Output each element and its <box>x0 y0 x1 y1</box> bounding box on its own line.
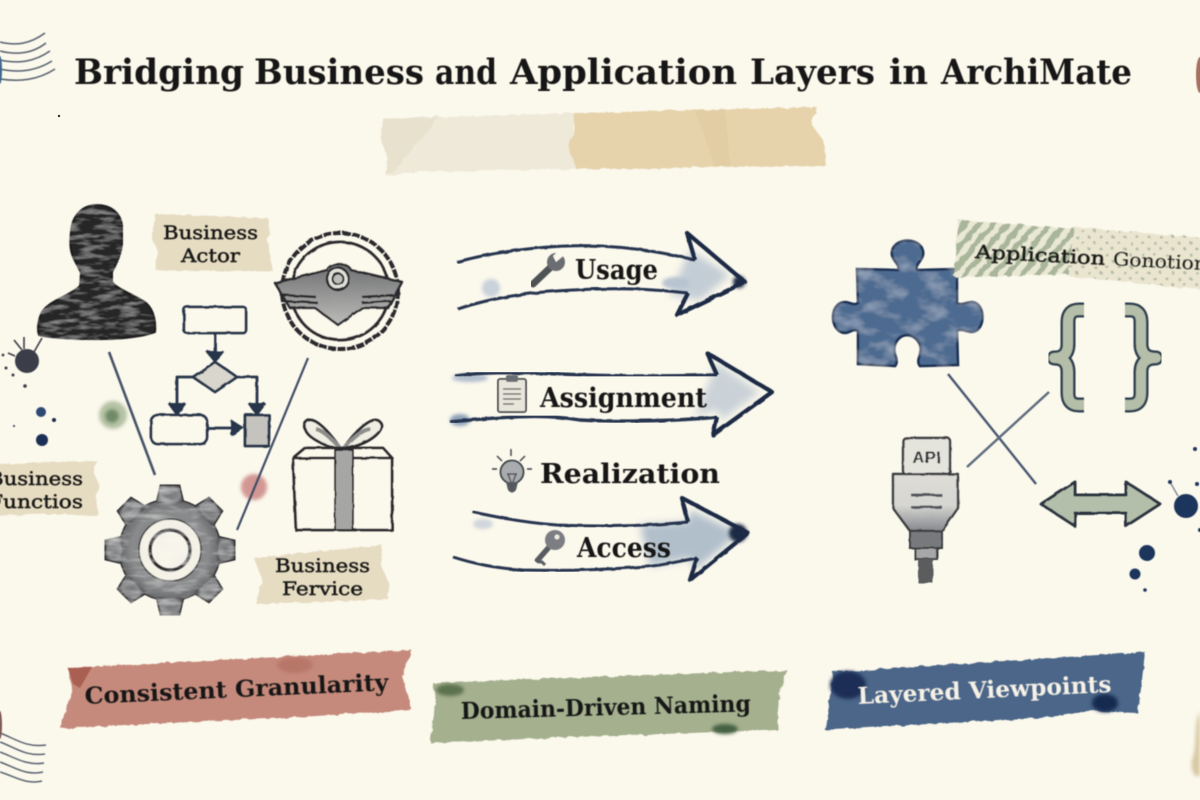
tape: consistent granularity: Consistent Granularity <box>84 669 390 710</box>
label: business service: Fervice <box>282 578 363 600</box>
title: Layers <box>750 52 875 93</box>
arrow: assignment <box>450 353 772 435</box>
label: business actor <box>153 214 273 271</box>
label: assignment: Assignment <box>539 383 707 414</box>
title: in <box>889 52 928 93</box>
tape: domain-driven naming: Domain-Driven Naming <box>460 690 751 725</box>
arrow: access <box>453 498 748 580</box>
ink blot: green <box>99 401 127 429</box>
title: ArchiMate <box>940 52 1132 93</box>
icon: process flowchart <box>151 307 269 446</box>
ink splatter: left <box>2 337 56 446</box>
label: business function <box>0 461 99 516</box>
icon: API plug: API <box>912 448 941 467</box>
arrow: usage <box>457 233 745 315</box>
title: Business <box>254 52 424 93</box>
panel: business layer <box>0 205 402 614</box>
ink blot: red <box>241 474 267 500</box>
label: application function tape: Application <box>974 241 1106 270</box>
icon: double-headed arrow <box>1041 482 1160 526</box>
icon: winged badge <box>275 233 402 349</box>
label: application function tape: Gonotion <box>1113 248 1200 275</box>
label: business service: Business <box>275 555 370 577</box>
label: business actor: Business <box>163 222 258 244</box>
icon: API plug <box>893 438 958 583</box>
title <box>74 52 1132 93</box>
tape: domain-driven naming <box>430 670 787 743</box>
postmark: bottom left <box>0 711 46 782</box>
title: and <box>435 52 497 93</box>
label: realization <box>492 449 720 492</box>
label: application function tape <box>954 220 1200 290</box>
tape: layered viewpoints <box>825 652 1145 730</box>
icon: clipboard <box>498 375 526 412</box>
icon: gift box <box>293 420 392 530</box>
icon: light bulb <box>492 449 532 492</box>
label: realization: Realization <box>540 459 720 490</box>
speck <box>58 115 60 117</box>
title: Application <box>509 52 737 93</box>
connector: badge to function <box>237 358 308 530</box>
tape: layered viewpoints: Layered Viewpoints <box>857 671 1112 710</box>
corner stain: bottom right <box>1192 712 1200 776</box>
tape: consistent granularity <box>60 650 412 728</box>
title: Bridging <box>74 52 244 93</box>
icon: gear <box>106 486 234 614</box>
connector: puzzle to double arrow <box>948 374 1036 484</box>
connector: actor to function <box>109 352 155 475</box>
label: access: Access <box>576 533 671 564</box>
blank torn tape: top center <box>381 107 827 176</box>
icon: key <box>536 530 565 565</box>
label: usage: Usage <box>575 255 658 286</box>
corner stain: top right <box>1196 57 1200 93</box>
icon: curly braces <box>1054 310 1156 405</box>
icon: puzzle piece <box>833 240 982 366</box>
postmark: top left <box>0 33 55 84</box>
icon: business actor silhouette <box>38 205 155 339</box>
ink splatter: right <box>1130 447 1200 592</box>
connector: braces to plug <box>967 392 1049 467</box>
panel: relationship arrows <box>450 233 772 580</box>
icon: wrench <box>533 248 568 284</box>
label: business actor: Actor <box>180 245 241 267</box>
label: business service <box>254 545 390 604</box>
panel: application layer <box>833 220 1200 592</box>
